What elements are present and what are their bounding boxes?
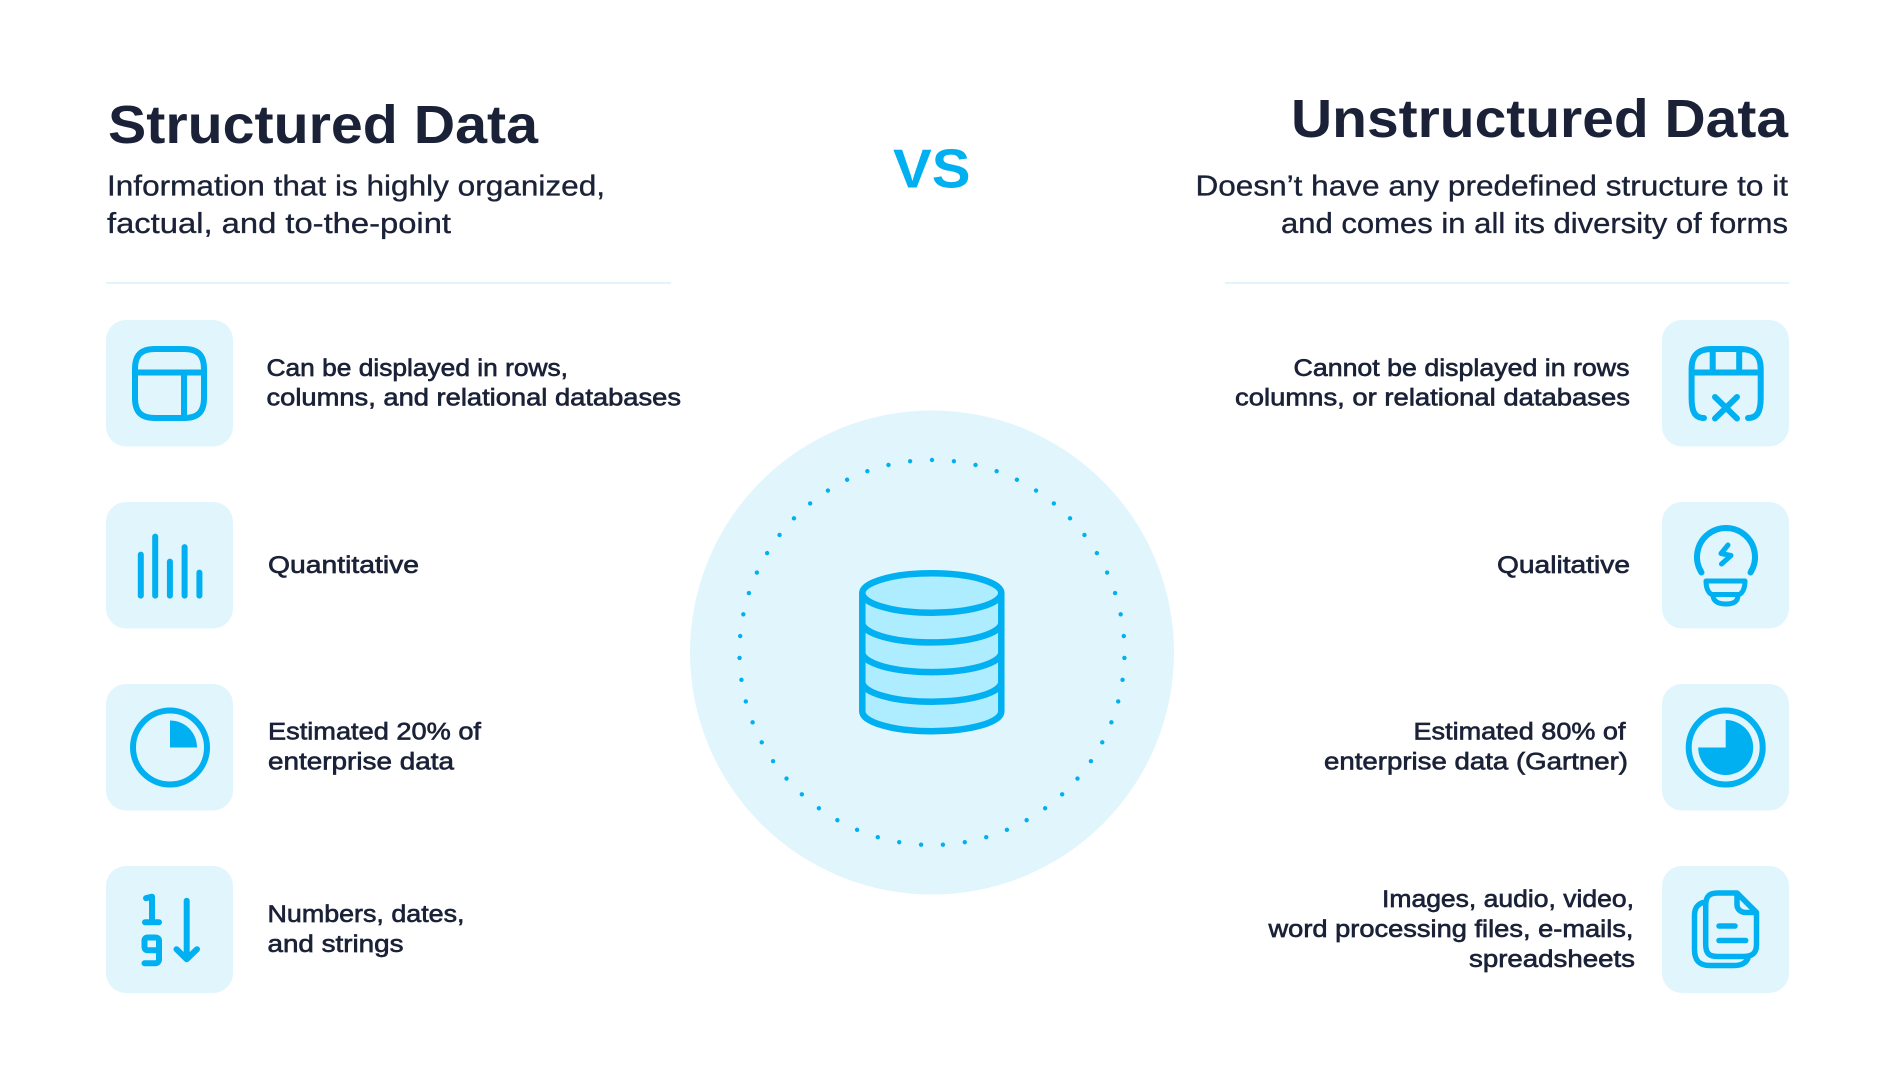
text: estimated 20 percent xyxy=(268,719,481,776)
text: numbers dates strings: and strings xyxy=(268,931,404,958)
panel: unstructured data rows xyxy=(1235,320,1789,993)
row: not relational xyxy=(1235,320,1789,446)
text: media formats xyxy=(1267,886,1635,973)
row: relational display xyxy=(106,320,681,446)
subtitle: structured data description: Information that is highly organized, xyxy=(107,171,605,203)
icon: database cylinder xyxy=(862,573,1001,731)
icon: broken table xyxy=(1662,320,1789,446)
text: qualitative: Qualitative xyxy=(1497,552,1630,579)
icon: documents xyxy=(1662,866,1789,993)
text: quantitative: Quantitative xyxy=(268,552,419,579)
subtitle: unstructured data description: and comes in all its diversity of forms xyxy=(1281,208,1788,240)
background circle xyxy=(690,410,1174,894)
subtitle: structured data description xyxy=(107,171,605,240)
title: Structured Data: Structured Data xyxy=(108,95,539,155)
text: cannot be displayed: Cannot be displayed in rows xyxy=(1294,355,1630,382)
icon: table layout xyxy=(106,320,233,446)
text: cannot be displayed xyxy=(1235,355,1630,412)
text: cannot be displayed: columns, or relational databases xyxy=(1235,385,1630,412)
row: numbers dates strings xyxy=(106,866,464,993)
title: Unstructured Data: Unstructured Data xyxy=(1291,89,1789,149)
subtitle: unstructured data description xyxy=(1196,171,1788,240)
text: can be displayed: columns, and relational databases xyxy=(266,385,681,412)
text: numbers dates strings: Numbers, dates, xyxy=(268,901,464,928)
text: estimated 80 percent: enterprise data (Gartner) xyxy=(1324,749,1628,776)
text: estimated 80 percent: Estimated 80% of xyxy=(1414,719,1626,746)
icon: numeric sort xyxy=(106,866,233,993)
text: can be displayed xyxy=(266,355,681,412)
row: media formats xyxy=(1267,866,1789,993)
text: media formats: spreadsheets xyxy=(1469,946,1635,973)
text: numbers dates strings xyxy=(268,901,464,958)
panel: structured data header xyxy=(107,95,605,240)
row: estimated 80 percent xyxy=(1324,684,1789,810)
icon: pie 20 percent xyxy=(106,684,233,810)
dotted ring xyxy=(740,460,1124,845)
panel: central database illustration xyxy=(690,410,1174,894)
panel: unstructured data header xyxy=(1196,89,1789,240)
row: qualitative xyxy=(1497,502,1789,628)
icon: pie 80 percent xyxy=(1662,684,1789,810)
row: quantitative xyxy=(106,502,419,628)
text: can be displayed: Can be displayed in rows, xyxy=(266,355,568,382)
text: media formats: word processing files, e-mails, xyxy=(1267,916,1634,943)
icon: light bulb xyxy=(1662,502,1789,628)
row: estimated 20 percent xyxy=(106,684,481,810)
text: estimated 20 percent: enterprise data xyxy=(268,749,454,776)
panel: structured data rows xyxy=(106,320,681,993)
icon: bar chart xyxy=(106,502,233,628)
subtitle: structured data description: factual, and to-the-point xyxy=(107,208,451,240)
text: estimated 20 percent: Estimated 20% of xyxy=(268,719,481,746)
heading: VS: VS xyxy=(893,138,970,200)
text: media formats: Images, audio, video, xyxy=(1382,886,1634,913)
text: estimated 80 percent xyxy=(1324,719,1628,776)
subtitle: unstructured data description: Doesn’t have any predefined structure to it xyxy=(1196,171,1788,203)
